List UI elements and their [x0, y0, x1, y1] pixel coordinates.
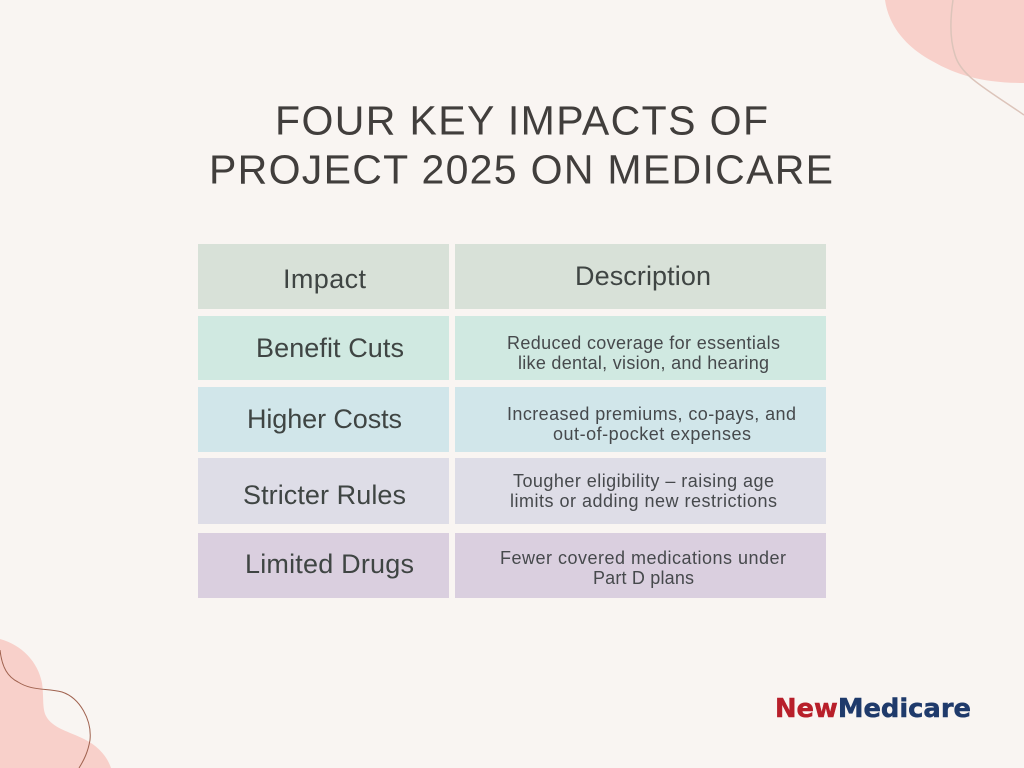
row: benefit cuts: Benefit Cuts	[256, 333, 404, 363]
row: stricter rules: limits or adding new restrictions	[510, 491, 777, 511]
row: benefit cuts	[198, 316, 826, 380]
row: limited drugs: Fewer covered medications under	[500, 548, 786, 568]
row: stricter rules	[198, 458, 826, 524]
header row	[198, 244, 826, 309]
row: stricter rules: Stricter Rules	[243, 480, 406, 510]
row: benefit cuts: Reduced coverage for essentials	[507, 333, 780, 353]
row: limited drugs: Limited Drugs	[245, 549, 414, 579]
logo: NewMedicare: NewMedicare	[775, 694, 971, 724]
decorative blob: bottom left	[0, 639, 111, 768]
table	[198, 244, 826, 598]
title	[209, 98, 833, 192]
header row: Description	[575, 261, 711, 291]
title: FOUR KEY IMPACTS OF	[275, 98, 768, 144]
row: higher costs	[198, 387, 826, 452]
row: benefit cuts: like dental, vision, and hearing	[518, 353, 769, 373]
row: higher costs: out-of-pocket expenses	[553, 424, 751, 444]
title: PROJECT 2025 ON MEDICARE	[209, 146, 833, 192]
header row: Impact	[283, 264, 366, 294]
row: limited drugs: Part D plans	[593, 568, 694, 588]
row: limited drugs	[198, 533, 826, 598]
decorative blob: top right	[885, 0, 1024, 115]
row: stricter rules: Tougher eligibility – raising age	[513, 471, 774, 491]
row: higher costs: Higher Costs	[247, 404, 402, 434]
row: higher costs: Increased premiums, co-pays, and	[507, 404, 796, 424]
